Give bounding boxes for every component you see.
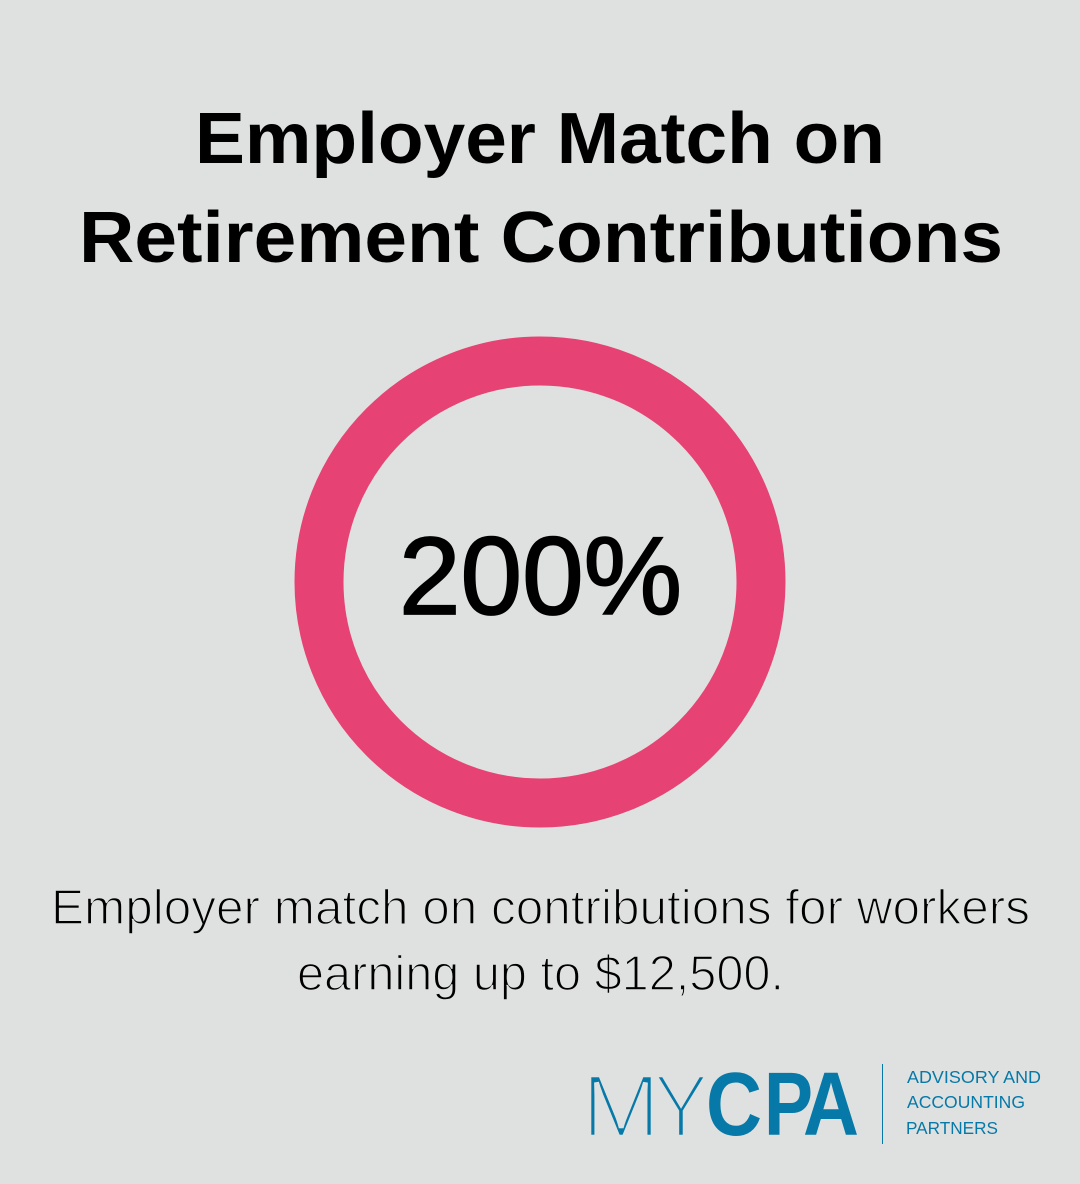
logo: MyCPA: P [764, 1055, 813, 1155]
ring chart: 200% [319, 361, 761, 803]
logo: MyCPA: ADVISORY AND [907, 1067, 1041, 1087]
description text: Employer match on contributions for workers [51, 881, 1030, 935]
title: Retirement Contributions [79, 198, 1003, 278]
logo: MyCPA: C [706, 1055, 762, 1155]
title [79, 99, 1003, 278]
logo: MyCPA: A [803, 1055, 859, 1155]
logo: MyCPA: Y [653, 1057, 709, 1157]
logo: MyCPA: ACCOUNTING [907, 1092, 1025, 1112]
title: Employer Match on [195, 99, 885, 179]
big number: 200% [399, 515, 682, 638]
description text [51, 881, 1030, 1001]
logo: MyCPA: M [581, 1057, 661, 1157]
logo: MyCPA [581, 1055, 1041, 1157]
logo: MyCPA: PARTNERS [906, 1118, 998, 1138]
description text: earning up to $12,500. [297, 947, 784, 1001]
